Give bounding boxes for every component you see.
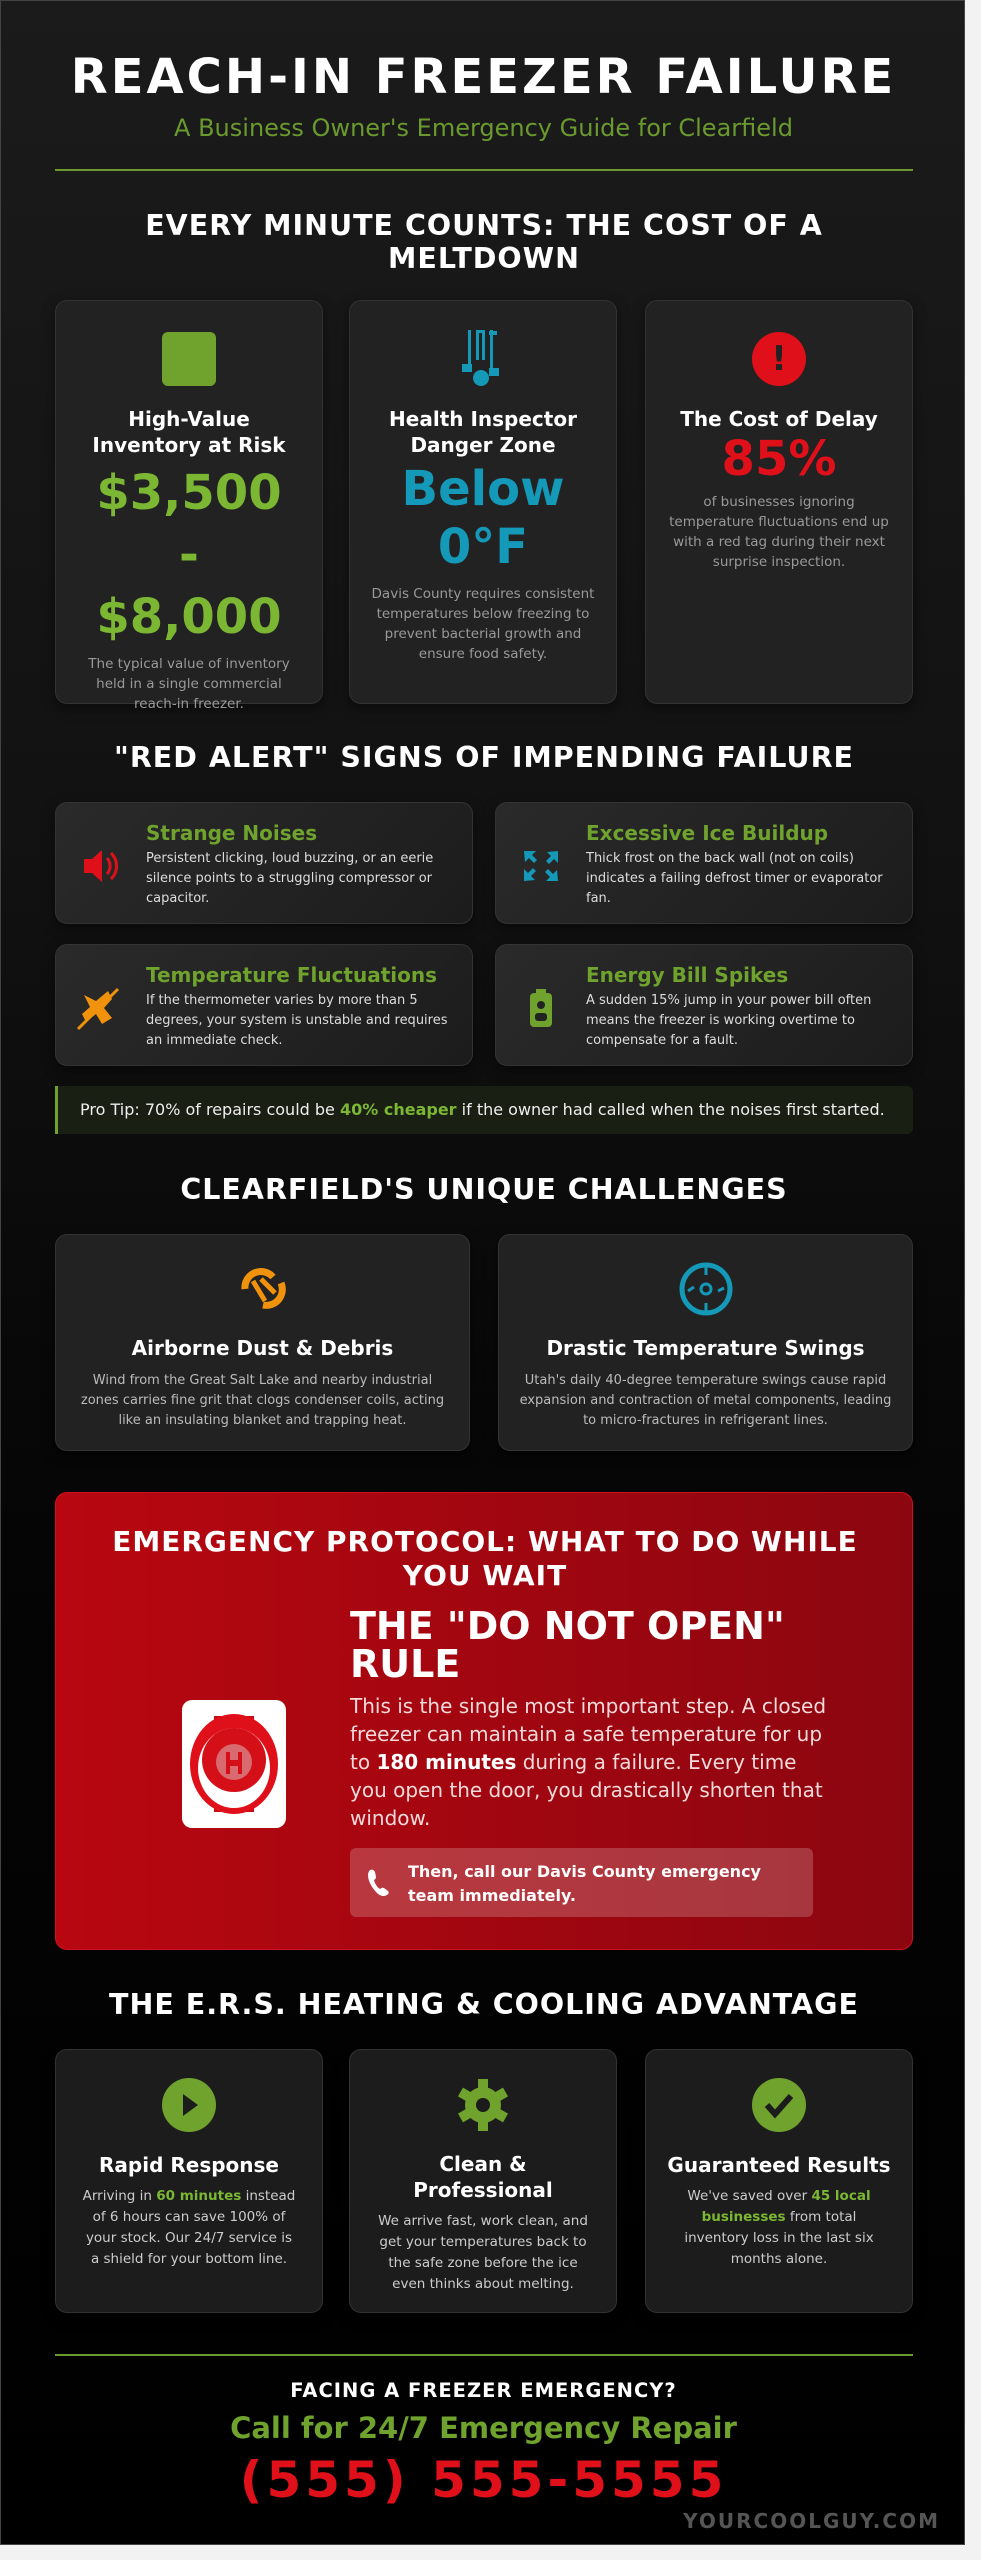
heading: do not open rule: RULE [350,1642,460,1686]
callout: call team [350,1848,813,1917]
card: clean & professional [349,2049,617,2313]
alert: strange noises: Persistent clicking, loud buzzing, or an eerie silence points to a struggling compressor or capacitor. [146,851,433,906]
heading: emergency protocol: YOU WAIT [403,1559,567,1592]
footer: website: YOURCOOLGUY.COM [683,2509,940,2533]
pro tip callout: Pro Tip: 70% of repairs could be 40% cheaper if the owner had called when the noises first started. [80,1100,885,1119]
icon: orange cross [77,988,119,1030]
pro tip callout [55,1086,913,1134]
icon: check circle [752,2078,806,2132]
icon: red exclamation [752,332,806,386]
icon: do not open [182,1700,286,1828]
card: health inspector [349,300,617,704]
card: airborne dust: Airborne Dust & Debris [132,1336,393,1360]
card: temperature swings: Utah's daily 40-degree temperature swings cause rapid expansion and contraction of metal components, leading to micro-fractures in refrigerant lines. [520,1373,891,1428]
footer: call to action: (555) 555-5555 [240,2451,727,2509]
card: health inspector: Davis County requires consistent temperatures below freezing to prevent bacterial growth and ensure food safety. [372,586,594,662]
card: rapid response: Rapid Response [99,2153,279,2177]
card: rapid response [55,2049,323,2313]
footer: call to action [230,2379,737,2509]
alert: strange noises [55,802,473,924]
alert: strange noises: Strange Noises [146,821,317,845]
alert: ice buildup: Excessive Ice Buildup [586,821,828,845]
card: high-value inventory [55,300,323,704]
footer: call to action: Call for 24/7 Emergency Repair [230,2411,737,2445]
heading: do not open rule [350,1604,785,1686]
icon: compress arrows [524,851,558,881]
heading: every minute counts [145,209,823,275]
heading: every minute counts: EVERY MINUTE COUNTS: THE COST OF A [145,209,823,242]
card: cost of delay: 85% [722,431,836,487]
card: guaranteed results [645,2049,913,2313]
card: cost of delay [645,300,913,704]
card: high-value inventory: $3,500 [96,465,282,521]
card: high-value inventory: The typical value of inventory held in a single commercial reach-in freezer. [88,656,290,712]
icon: red exclamation: ! [771,339,787,379]
callout: call team: Then, call our Davis County emergency [408,1862,761,1881]
heading: red alert: "RED ALERT" SIGNS OF IMPENDING FAILURE [114,741,854,774]
card: airborne dust [55,1234,470,1451]
card: cost of delay: The Cost of Delay [680,407,878,431]
card: health inspector: Below [402,461,564,517]
icon: phone [368,1870,389,1896]
card: high-value inventory: - [179,527,199,583]
icon: gauge [680,1262,732,1316]
heading: clearfield challenges: CLEARFIELD'S UNIQUE CHALLENGES [180,1173,788,1206]
card: health inspector: Danger Zone [410,433,556,457]
card: clean & professional: Clean & [439,2152,527,2176]
card: cost of delay: of businesses ignoring temperature fluctuations end up with a red tag during their next surprise inspection. [669,494,889,570]
card: guaranteed results: Guaranteed Results [667,2153,891,2177]
card: temperature swings [498,1234,913,1451]
icon: battery badge [530,989,552,1027]
footer: call to action: FACING A FREEZER EMERGENCY? [290,2379,677,2402]
text: do not open body: This is the single most important step. A closed freezer can maintain a safe temperature for up to 180 minutes during a failure. Every time you open the door, you drastically shorten that window. [350,1694,826,1830]
alert: energy bill [495,944,913,1066]
alert: temperature fluctuations: Temperature Fluctuations [146,963,437,987]
alert: ice buildup: Thick frost on the back wall (not on coils) indicates a failing defrost timer or evaporator fan. [586,851,883,906]
heading: every minute counts: MELTDOWN [388,242,580,275]
heading: emergency protocol: EMERGENCY PROTOCOL: WHAT TO DO WHILE [112,1525,858,1558]
alert: energy bill: A sudden 15% jump in your power bill often means the freezer is working overtime to compensate for a fault. [586,993,871,1048]
card: high-value inventory: Inventory at Risk [92,433,286,457]
card: high-value inventory: High-Value [128,407,250,431]
title: REACH-IN FREEZER FAILURE [71,49,896,105]
heading: emergency protocol [112,1525,858,1592]
icon: thermometer tools [462,330,499,386]
icon: gear [458,2079,508,2131]
icon: play circle [162,2078,216,2132]
subtitle: A Business Owner's Emergency Guide for Clearfield [174,114,793,142]
card: high-value inventory: $8,000 [96,589,282,645]
card: health inspector: Health Inspector [389,407,577,431]
card: rapid response: Arriving in 60 minutes instead of 6 hours can save 100% of your stock. Our 24/7 service is a shield for your bottom line. [83,2188,295,2267]
alert: ice buildup [495,802,913,924]
heading: ers advantage: THE E.R.S. HEATING & COOLING ADVANTAGE [109,1988,859,2021]
card: guaranteed results: We've saved over 45 local businesses from total inventory loss in the last six months alone. [684,2188,874,2267]
alert: energy bill: Energy Bill Spikes [586,963,788,987]
icon: dust swirl [241,1268,286,1309]
icon: green square [162,332,216,386]
card: health inspector: 0°F [438,519,528,575]
heading: do not open rule: THE "DO NOT OPEN" [350,1604,785,1648]
card: clean & professional: We arrive fast, work clean, and get your temperatures back to the safe zone before the ice even thinks about melting. [378,2213,588,2292]
card: temperature swings: Drastic Temperature Swings [546,1336,865,1360]
panel: emergency protocol [55,1492,913,1950]
icon: speaker [84,850,118,882]
callout: call team: team immediately. [408,1886,576,1905]
alert: temperature fluctuations: If the thermometer varies by more than 5 degrees, your system is unstable and requires an immediate check. [146,993,448,1048]
card: airborne dust: Wind from the Great Salt Lake and nearby industrial zones carries fine grit that clogs condenser coils, acting like an insulating blanket and trapping heat. [81,1373,444,1428]
alert: temperature fluctuations [55,944,473,1066]
card: clean & professional: Professional [413,2178,553,2202]
